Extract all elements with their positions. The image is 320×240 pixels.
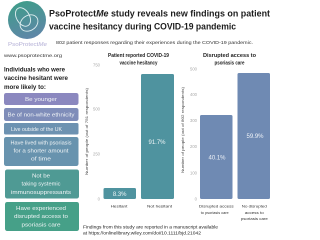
- left column heading: Individuals who were: [4, 67, 65, 74]
- chart heading: [108, 53, 169, 67]
- title: [49, 9, 270, 31]
- y axis title: Number of people (out of 751 respondents): [84, 87, 89, 175]
- y axis ticks: 500: [190, 66, 198, 72]
- factor: disrupted access: [5, 202, 79, 231]
- factor: disrupted access: disrupted access to: [14, 214, 68, 220]
- subtitle: 802 patient responses regarding their experiences during the COVID-19 pandemic.: [56, 40, 253, 45]
- factor: not on immunosuppressants: Not be: [32, 174, 50, 180]
- icon: PsoProtectMe logo: [8, 1, 46, 39]
- bar labels: access to: [245, 210, 264, 215]
- left column heading: vaccine hesitant were: [4, 75, 68, 82]
- chart heading: [203, 53, 256, 67]
- y axis ticks: 200: [190, 144, 198, 149]
- factor: disrupted access: psoriasis care: [22, 222, 60, 228]
- factor: not on immunosuppressants: immunosuppressants: [11, 190, 71, 196]
- factor: be younger: Be younger: [25, 97, 57, 103]
- factor: not on immunosuppressants: [5, 170, 79, 198]
- bar: hesitant: 8.3%: [113, 192, 127, 198]
- y axis ticks: 100: [190, 170, 198, 176]
- bar: hesitant: [104, 188, 136, 199]
- footer note: [83, 224, 218, 235]
- y axis ticks: 400: [190, 92, 198, 97]
- bar: disrupted access: [200, 115, 232, 199]
- factor: shorter psoriasis duration: [4, 137, 78, 166]
- bar labels: [111, 204, 173, 209]
- y axis title: Number of people (out of 802 respondents): [180, 86, 185, 173]
- factor: disrupted access: Have experienced: [16, 206, 66, 212]
- title: PsoProtectMe study reveals new findings on patient: [49, 9, 270, 19]
- bar labels: Not hesitant: [147, 204, 173, 209]
- factor: non-white ethnicity: Be of non-white ethnicity: [8, 112, 75, 118]
- title: vaccine hesitancy during COVID-19 pandemic: [49, 21, 236, 31]
- chart heading: Disrupted access to: [203, 53, 256, 59]
- y axis ticks: 750: [93, 62, 101, 68]
- chart heading: psoriasis care: [214, 61, 245, 67]
- footer note: at https://onlinelibrary.wiley.com/doi/10.1111/bjd.21042: [83, 230, 201, 235]
- footer note: Findings from this study are reported in a manuscript available: [83, 224, 218, 229]
- chart: disrupted access to psoriasis care: [180, 53, 270, 221]
- factor: shorter psoriasis duration: for a shorter amount: [14, 148, 69, 154]
- y axis ticks: 0: [98, 196, 101, 202]
- bar labels: to psoriasis care: [201, 210, 229, 215]
- chart heading: Patient reported COVID-19: [108, 53, 169, 59]
- y axis ticks: [93, 62, 101, 202]
- y axis ticks: 300: [190, 118, 198, 123]
- chart: patient reported vaccine hesitancy: [84, 53, 174, 209]
- bar: not hesitant: [141, 74, 174, 199]
- website: www.psoprotectme.org: [4, 53, 62, 59]
- bar: no disrupted access: [238, 73, 270, 199]
- bar labels: [199, 204, 268, 221]
- factor: shorter psoriasis duration: Have lived with psoriasis: [10, 140, 72, 146]
- chart heading: vaccine hesitancy: [120, 61, 158, 67]
- bar: no disrupted access: 59.9%: [246, 134, 264, 140]
- factor: outside UK: Live outside of the UK: [11, 127, 62, 133]
- bar: disrupted access: 40.1%: [208, 156, 226, 162]
- y axis ticks: 250: [93, 152, 101, 156]
- panel: factor list: [4, 93, 79, 231]
- y axis ticks: [190, 66, 198, 202]
- logo wordmark: PsoProtect Me: [8, 42, 47, 48]
- y axis ticks: 500: [93, 107, 101, 112]
- bar labels: Hesitant: [111, 204, 128, 209]
- left column heading: more likely to:: [4, 84, 46, 91]
- left column heading: [4, 67, 68, 91]
- factor: not on immunosuppressants: taking systemic: [22, 182, 61, 188]
- factor: shorter psoriasis duration: of time: [31, 156, 51, 162]
- bar labels: psoriasis care: [241, 216, 268, 221]
- y axis ticks: 0: [195, 196, 198, 202]
- bar labels: No disrupted: [242, 204, 267, 209]
- bar labels: Disrupted access: [199, 204, 234, 209]
- bar: not hesitant: 91.7%: [148, 140, 166, 146]
